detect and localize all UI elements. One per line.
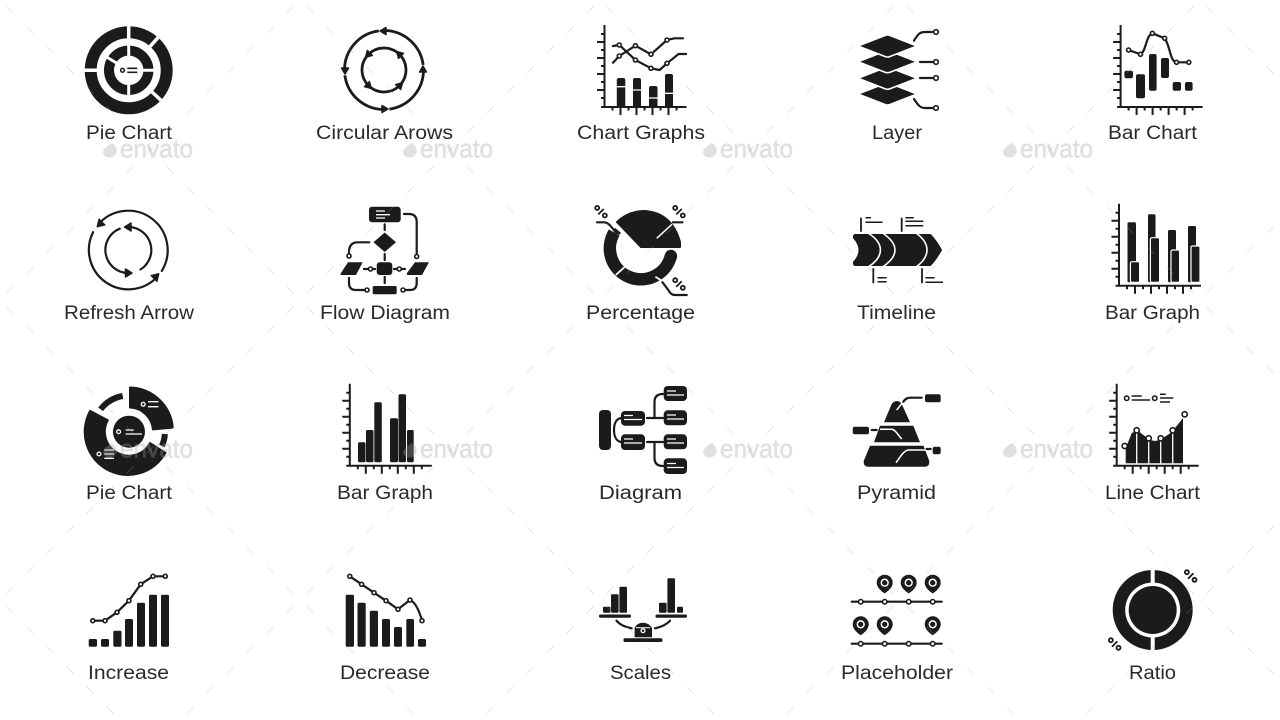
icon: pie chart (donut) — [84, 24, 167, 108]
label: Pie Chart 2: Pie Chart — [86, 483, 173, 504]
label: Timeline: Timeline — [857, 303, 936, 324]
label: Bar Chart: Bar Chart — [1108, 123, 1198, 144]
icon: ratio — [1109, 569, 1196, 651]
watermark row 3 — [103, 434, 1093, 464]
label: Bar Graph 2: Bar Graph — [337, 483, 433, 504]
watermark row 3: envato — [420, 434, 493, 464]
label: Layer: Layer — [872, 123, 923, 144]
watermark row 3: envato — [1020, 434, 1093, 464]
label: Circular Arows: Circular Arows — [316, 123, 453, 144]
label: Chart Graphs: Chart Graphs — [577, 123, 705, 144]
label: Placeholder: Placeholder — [841, 663, 954, 684]
icon: pie chart (segments) — [85, 388, 173, 475]
icon: pyramid — [853, 394, 941, 466]
label: Line Chart: Line Chart — [1105, 483, 1201, 504]
label: Percentage: Percentage — [586, 303, 695, 324]
label: Decrease: Decrease — [340, 663, 430, 684]
icon: diagram — [599, 386, 687, 474]
label: Ratio: Ratio — [1129, 663, 1176, 684]
label: Refresh Arrow: Refresh Arrow — [64, 303, 194, 324]
label: Bar Graph: Bar Graph — [1105, 303, 1200, 324]
icon: flow diagram — [340, 207, 429, 294]
label: Diagram: Diagram — [599, 483, 682, 504]
label: Increase: Increase — [88, 663, 169, 684]
watermark row 3: envato — [120, 434, 193, 464]
icon: bar graph — [342, 384, 432, 474]
label: Flow Diagram: Flow Diagram — [320, 303, 450, 324]
icon: bar chart — [1113, 25, 1203, 115]
icon: line chart — [1109, 384, 1199, 474]
watermark row 1: envato — [120, 134, 193, 164]
icon: increase — [89, 574, 169, 647]
icon: layer — [858, 30, 938, 110]
icon: bar graph (paired) — [1112, 204, 1201, 294]
icon: refresh arrow — [89, 211, 168, 289]
icon: percentage — [595, 206, 687, 295]
label: Scales: Scales — [610, 663, 671, 684]
icon: scales — [599, 578, 687, 642]
label: Pyramid: Pyramid — [857, 483, 936, 504]
watermark row 1 — [103, 134, 1093, 164]
icon: chart graphs — [597, 25, 686, 115]
watermark row 1: envato — [1020, 134, 1093, 164]
watermark row 1: envato — [720, 134, 793, 164]
watermark row 3: envato — [720, 434, 793, 464]
watermark row 1: envato — [420, 134, 493, 164]
icon: placeholder — [852, 575, 942, 646]
icon: decrease — [346, 574, 426, 647]
icon: circular arrows — [342, 28, 426, 112]
icon: timeline — [853, 218, 943, 283]
label: Pie Chart: Pie Chart — [86, 123, 173, 144]
